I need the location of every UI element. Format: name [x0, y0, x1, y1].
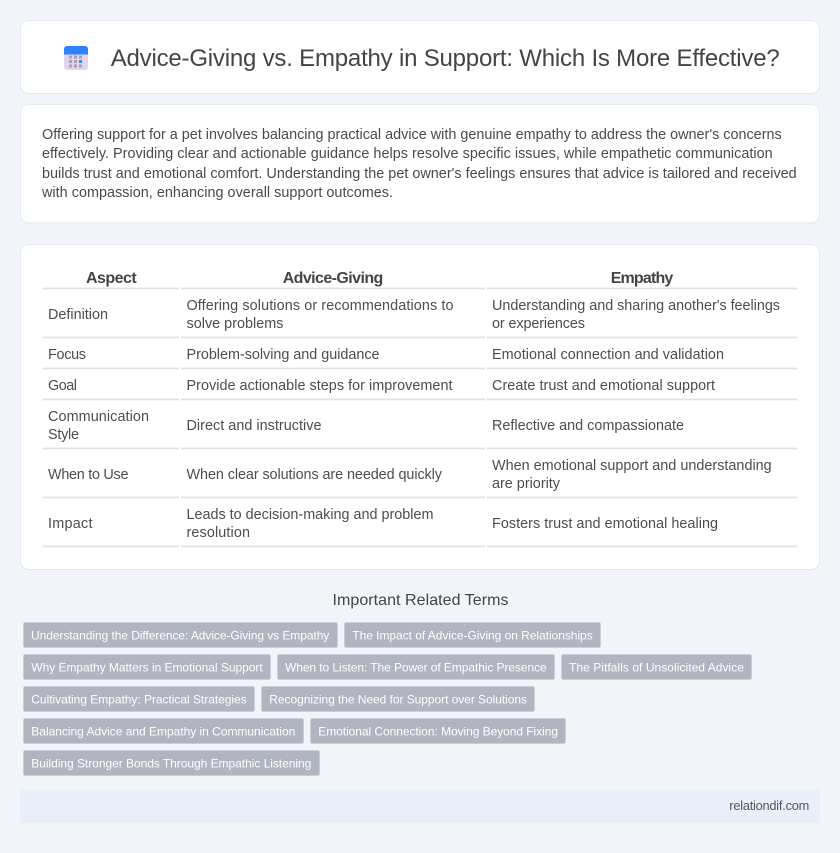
panel: comparison table: [20, 244, 820, 570]
row: Communication Style: [48, 409, 684, 443]
title: Advice-Giving vs. Empathy in Support: Which Is More Effective?: [111, 45, 780, 72]
tags: related terms: [24, 622, 752, 776]
text: intro paragraph: builds trust and emotional comfort. Understanding the pet owner's feelings ensures that advice is tailored and received: [42, 166, 797, 182]
panel: header: [20, 20, 820, 94]
row: Impact: resolution: [186, 525, 250, 541]
tag: [24, 654, 270, 680]
row: Definition: solve problems: [186, 316, 284, 332]
row: Communication Style: Style: [48, 427, 79, 443]
row: Focus: [48, 347, 724, 363]
row: Impact: Impact: [48, 516, 92, 532]
tag: Why Empathy Matters in Emotional Support: [31, 660, 263, 674]
tag: [344, 622, 600, 648]
row: Impact: [48, 507, 718, 541]
text: intro paragraph: Offering support for a pet involves balancing practical advice with genuine empathy to address the owner's concerns: [42, 127, 782, 143]
row: Communication Style: Reflective and compassionate: [492, 418, 684, 434]
tag: [24, 686, 254, 712]
icon: calendar: [64, 46, 88, 70]
heading: Aspect: Aspect: [86, 270, 137, 287]
tag: Balancing Advice and Empathy in Communication: [31, 724, 295, 738]
row: Goal: [48, 378, 715, 394]
tag: [562, 654, 752, 680]
tag: Recognizing the Need for Support over Solutions: [269, 692, 527, 706]
row: Communication Style: Direct and instructive: [186, 418, 322, 434]
tag: Building Stronger Bonds Through Empathic Listening: [31, 756, 311, 770]
heading: Advice-Giving: Advice-Giving: [283, 270, 383, 287]
tag: [24, 750, 320, 776]
heading: related terms: Important Related Terms: [332, 592, 508, 609]
tag: When to Listen: The Power of Empathic Presence: [285, 660, 547, 674]
row: Focus: Problem-solving and guidance: [186, 347, 380, 363]
tag: [310, 718, 566, 744]
text: intro paragraph: effectively. Providing clear and actionable guidance helps resolve specific issues, while empathetic communication: [42, 146, 773, 162]
row: Definition: Definition: [48, 307, 108, 323]
row: When to Use: are priority: [492, 476, 561, 492]
row: Communication Style: Communication: [48, 409, 149, 425]
row: When to Use: When clear solutions are needed quickly: [186, 467, 443, 483]
footer: [20, 790, 820, 823]
tag: [24, 718, 304, 744]
row: Definition: [48, 298, 780, 332]
heading: Empathy: Empathy: [611, 270, 673, 287]
tag: The Pitfalls of Unsolicited Advice: [569, 660, 744, 674]
row: Focus: Emotional connection and validation: [492, 347, 724, 363]
row: Goal: Goal: [48, 378, 77, 394]
row: Definition: or experiences: [492, 316, 585, 332]
tag: [278, 654, 554, 680]
tag: Emotional Connection: Moving Beyond Fixing: [318, 724, 558, 738]
tag: [262, 686, 534, 712]
text: source: relationdif.com: [729, 798, 809, 813]
panel: introduction: [20, 104, 820, 223]
row: Definition: Understanding and sharing another's feelings: [492, 298, 780, 314]
row: When to Use: When to Use: [48, 467, 128, 483]
row: Impact: Fosters trust and emotional healing: [492, 516, 718, 532]
row: When to Use: When emotional support and understanding: [492, 458, 772, 474]
row: Goal: Create trust and emotional support: [492, 378, 715, 394]
tag: The Impact of Advice-Giving on Relationships: [352, 628, 593, 642]
row: Goal: Provide actionable steps for improvement: [186, 378, 452, 394]
row: Definition: Offering solutions or recommendations to: [186, 298, 454, 314]
row: Impact: Leads to decision-making and problem: [186, 507, 434, 523]
tag: Understanding the Difference: Advice-Giving vs Empathy: [31, 628, 329, 642]
text: intro paragraph: with compassion, enhancing overall support outcomes.: [41, 185, 393, 201]
text: intro paragraph: [41, 127, 797, 201]
row: Focus: Focus: [48, 347, 86, 363]
row: When to Use: [48, 458, 772, 492]
tag: [24, 622, 338, 648]
tag: Cultivating Empathy: Practical Strategies: [31, 692, 247, 706]
